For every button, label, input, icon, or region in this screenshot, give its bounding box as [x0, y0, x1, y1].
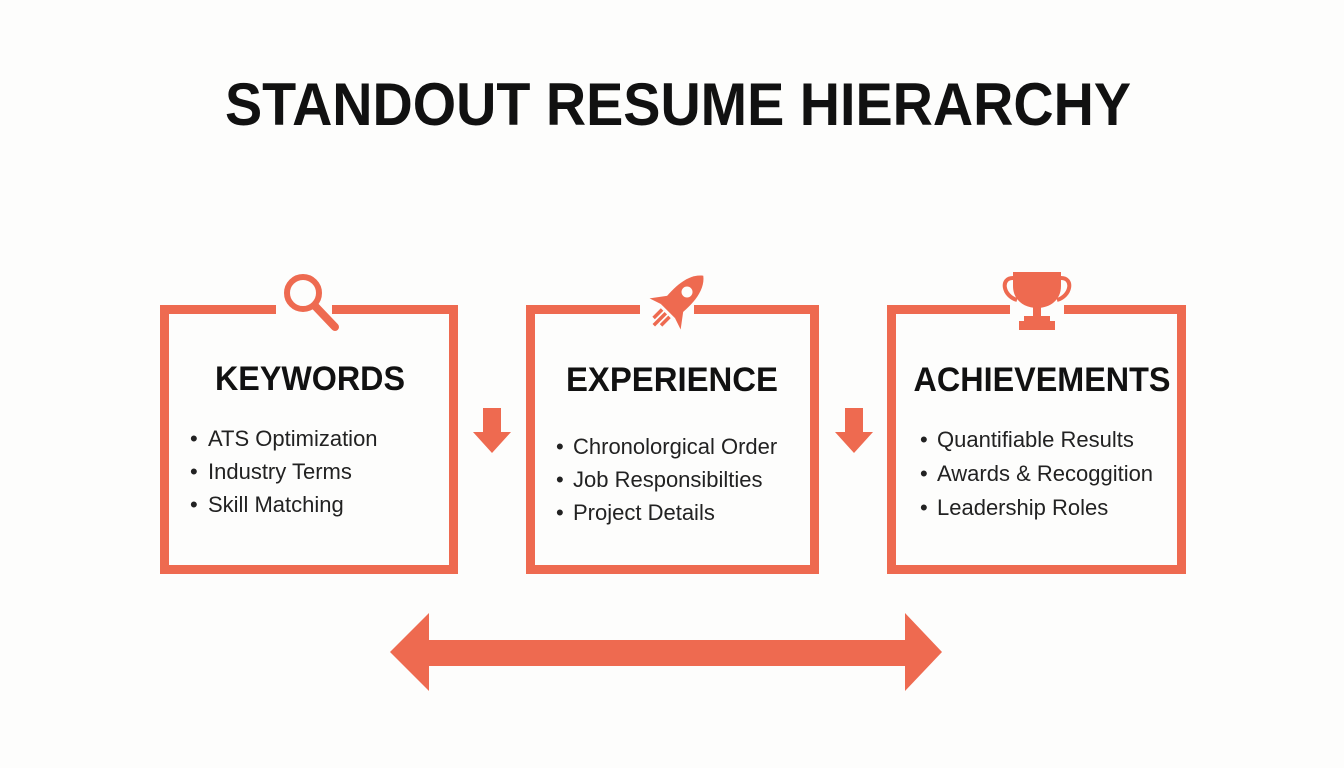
- icon: trophy: [1005, 272, 1069, 330]
- bullet list: achievements: [920, 427, 1153, 520]
- bullet list: experience: •: [556, 434, 564, 459]
- panel: keywords: [164, 277, 454, 570]
- icon: rocket: [638, 260, 719, 341]
- bullet list: experience: Chronolorgical Order: [573, 434, 777, 459]
- bullet list: keywords: Industry Terms: [208, 459, 352, 484]
- heading: keywords: KEYWORDS: [215, 360, 405, 398]
- bullet list: achievements: Quantifiable Results: [937, 427, 1134, 452]
- panel: achievements: [892, 272, 1182, 570]
- icon: magnifying glass: [276, 277, 335, 327]
- bullet list: keywords: •: [190, 459, 198, 484]
- arrow: double horizontal: [390, 613, 942, 691]
- heading: achievements: ACHIEVEMENTS: [914, 361, 1170, 399]
- heading: experience: EXPERIENCE: [566, 361, 778, 399]
- bullet list: achievements: •: [920, 461, 928, 486]
- bullet list: achievements: Leadership Roles: [937, 495, 1108, 520]
- bullet list: keywords: •: [190, 426, 198, 451]
- bullet list: achievements: •: [920, 495, 928, 520]
- bullet list: achievements: Awards & Recoggition: [937, 461, 1153, 486]
- panel: experience: [530, 260, 814, 570]
- bullet list: experience: [556, 434, 777, 525]
- bullet list: experience: Project Details: [573, 500, 715, 525]
- bullet list: experience: Job Responsibilties: [573, 467, 763, 492]
- bullet list: achievements: •: [920, 427, 928, 452]
- title: STANDOUT RESUME HIERARCHY: [225, 71, 1131, 138]
- bullet list: keywords: Skill Matching: [208, 492, 344, 517]
- arrow: down 1: [473, 408, 511, 453]
- arrow: down 2: [835, 408, 873, 453]
- bullet list: experience: •: [556, 467, 564, 492]
- bullet list: keywords: [190, 426, 378, 517]
- bullet list: experience: •: [556, 500, 564, 525]
- bullet list: keywords: •: [190, 492, 198, 517]
- bullet list: keywords: ATS Optimization: [208, 426, 378, 451]
